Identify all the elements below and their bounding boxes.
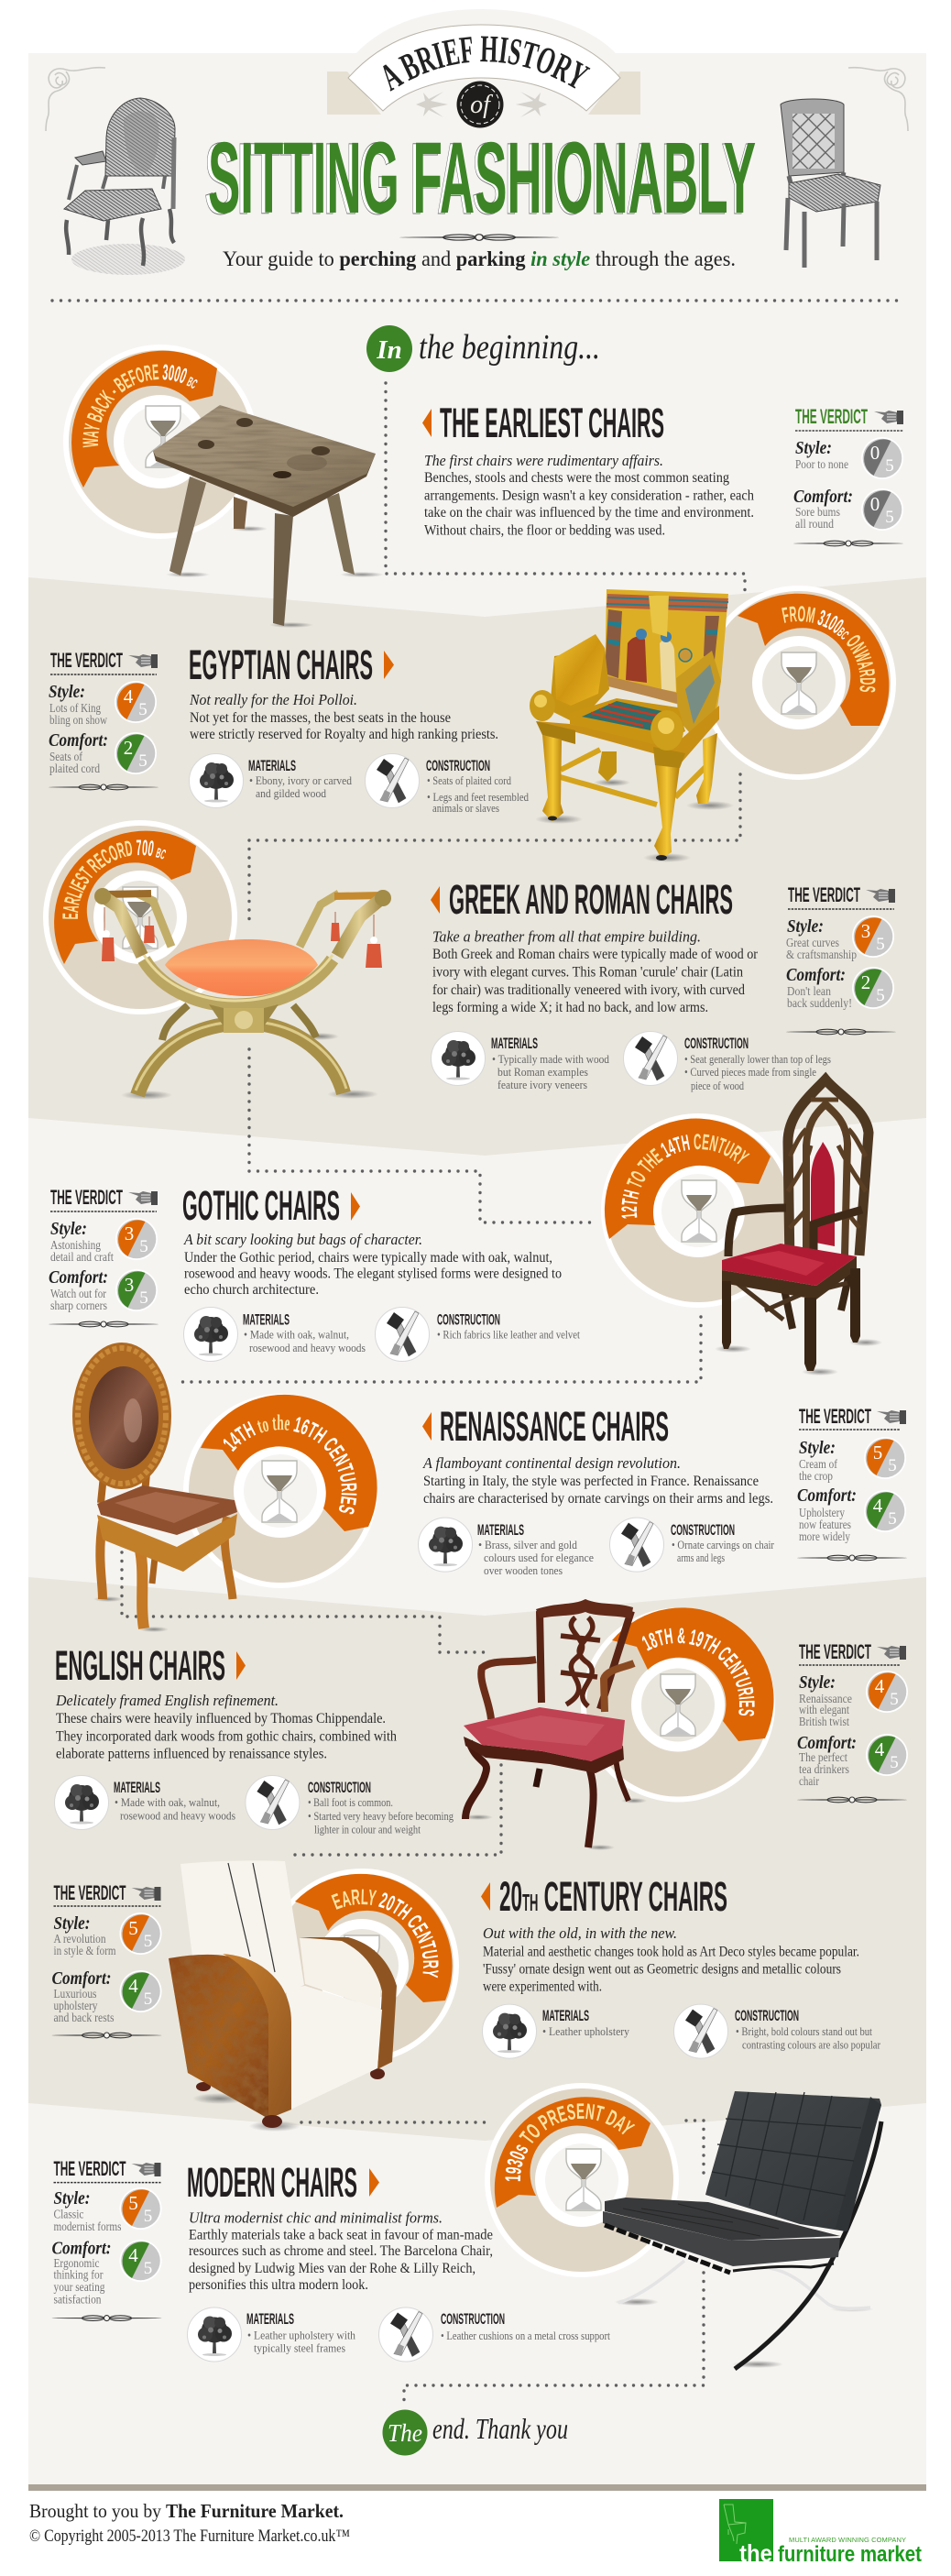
renaissance chair photo [72,1343,237,1632]
verdict: Comfort: [49,1267,108,1288]
verdict: Style: [50,1219,87,1239]
construction [623,1032,831,1092]
construction [376,1307,580,1362]
of badge: of [470,91,493,119]
materials: colours used for elegance [484,1551,594,1564]
verdict: with elegant [799,1704,849,1717]
verdict: 5 [144,1990,152,2009]
description: Not really for the Hoi Polloi. [189,691,357,708]
materials: • Typically made with wood [492,1052,609,1066]
tan background band 1 [28,577,926,1156]
description: Starting in Italy, the style was perfected in France. Renaissance [423,1474,759,1489]
verdict: 4 [875,1675,885,1697]
verdict: 5 [885,508,894,527]
heading [431,876,733,923]
date badge: earliest record [43,820,237,1014]
verdict: THE VERDICT [50,649,123,672]
verdict: 2 [861,971,870,993]
description: personifies this ultra modern look. [189,2277,368,2293]
construction [246,1776,454,1836]
engraved chair left [64,98,185,275]
verdict: 5 [888,1509,897,1529]
verdict: 4 [128,1975,138,1997]
date badge: 1930s to present day: 1930s TO PRESENT DAY [505,2103,636,2181]
description: for chair) was traditionally veneered with ivory, with curved [432,982,745,998]
heading: EGYPTIAN CHAIRS [189,641,373,688]
construction: CONSTRUCTION [671,1522,735,1539]
verdict: Comfort: [797,1733,857,1753]
verdict: The perfect [799,1751,847,1765]
verdict: Style: [53,2188,90,2209]
heading: ENGLISH CHAIRS [55,1642,225,1689]
description: chairs are characterised by ornate carvings on their arms and legs. [423,1491,773,1507]
tan background band 2 [28,1577,926,2141]
verdict: modernist forms [53,2220,121,2234]
verdict: 4 [873,1495,883,1517]
verdict: Poor to none [795,458,848,472]
materials: • Leather upholstery with [247,2329,355,2342]
verdict: plaited cord [49,762,100,776]
section: earliest chairs [422,400,903,546]
description: take on the chair was influenced by the time and environment. [424,505,754,521]
verdict: Renaissance [799,1693,852,1706]
verdict [797,1640,908,1803]
barcelona chair photo [603,2091,881,2369]
date badge: 12th to 14th century: 12TH TO THE 14TH CENTURY [621,1134,749,1219]
materials: MATERIALS [246,2311,294,2328]
description [424,452,754,539]
description [432,928,759,1015]
verdict: Seats of [49,751,82,764]
verdict [49,1186,158,1327]
date badge: 18th and 19th centuries [581,1607,775,1802]
date badge: from 3100bc [713,586,896,780]
heading [55,1642,246,1689]
construction: • Started very heavy before becoming [308,1809,454,1823]
verdict: Comfort: [51,1968,112,1989]
date badge: 14th to 16th centuries [183,1394,377,1588]
description: echo church architecture. [184,1282,319,1298]
materials: over wooden tones [484,1563,563,1577]
verdict: chair [799,1775,819,1789]
verdict: your seating [53,2281,104,2295]
section: 20th century chairs [51,1873,881,2058]
side stars [416,92,547,117]
dotted timeline paths [122,383,745,2403]
materials: MATERIALS [248,758,296,774]
banner text: A BRIEF HISTORY [383,37,590,92]
verdict: 0 [870,493,880,515]
verdict: Comfort: [793,487,853,507]
construction: • Ornate carvings on chair [672,1538,775,1551]
construction: piece of wood [691,1079,744,1092]
heading [189,641,394,688]
materials: • Brass, silver and gold [478,1538,577,1551]
footer logo [719,2499,922,2567]
verdict: 2 [124,737,133,759]
description: Take a breather from all that empire building. [432,928,701,946]
verdict: Watch out for [50,1288,106,1301]
engraved chair right [781,99,880,268]
materials: • Leather upholstery [542,2024,629,2038]
materials [189,753,352,808]
description: were experimented with. [483,1979,602,1995]
egyptian chair photo [530,589,734,862]
verdict: Style: [799,1438,836,1458]
construction: • Legs and feet resembled [427,790,529,804]
section: modern chairs [51,2157,610,2362]
art deco chair photo [169,1860,397,2132]
verdict: Comfort: [797,1485,857,1506]
materials [55,1776,235,1829]
description [189,691,498,742]
verdict: Don't lean [787,985,831,999]
description: rosewood and heavy woods. The elegant stylised forms were designed to [184,1266,562,1282]
description: Ultra modernist chic and minimalist forms. [189,2209,443,2227]
verdict [51,2157,161,2321]
verdict: 4 [128,2244,138,2266]
verdict: & craftsmanship [786,948,857,962]
section: egyptian chairs [49,641,529,815]
description [189,2209,493,2293]
verdict: Style: [787,916,824,937]
closing: the end thank you: end. Thank you [432,2412,568,2445]
verdict: satisfaction [53,2293,101,2307]
construction: • Leather cushions on a metal cross support [441,2329,610,2342]
footer credits: Brought to you by The Furniture Market. [29,2500,344,2522]
construction: CONSTRUCTION [441,2311,505,2328]
materials [431,1032,609,1091]
closing: the end thank you [383,2410,568,2456]
heading [422,400,664,446]
heading: GOTHIC CHAIRS [182,1182,340,1229]
date badge: early 20th century: EARLY 20TH CENTURY [332,1890,438,1978]
section: renaissance chairs [418,1403,907,1577]
footer logo: furniture market [778,2542,922,2567]
date badge: 1930s to present day [485,2083,679,2277]
construction [379,2307,610,2362]
description: A bit scary looking but bags of character. [183,1231,422,1248]
verdict: sharp corners [50,1299,107,1313]
verdict [49,649,158,790]
description: elaborate patterns influenced by renaissance styles. [56,1747,327,1761]
intro: in the beginning: In [376,335,402,365]
construction [610,1518,775,1572]
materials: MATERIALS [243,1312,290,1329]
description: Without chairs, the floor or bedding was used. [424,522,665,539]
verdict: 5 [139,1237,148,1256]
verdict [793,405,903,546]
stool photo [153,405,384,628]
verdict: thinking for [53,2269,104,2282]
construction: animals or slaves [432,801,499,815]
verdict: 5 [138,751,148,771]
verdict: Style: [795,438,832,458]
verdict [797,1405,907,1561]
header divider [52,299,903,302]
description [483,1924,859,1995]
materials [183,1307,366,1362]
verdict: 5 [873,1441,882,1463]
heading [182,1182,360,1229]
verdict: British twist [799,1716,849,1729]
verdict: 5 [144,1932,152,1951]
description: A flamboyant continental design revolution. [422,1454,681,1472]
description [183,1231,562,1298]
construction: CONSTRUCTION [684,1036,749,1052]
materials: • Made with oak, walnut, [115,1795,220,1809]
materials: feature ivory veneers [497,1078,587,1091]
verdict: 5 [144,2207,152,2226]
materials: • Made with oak, walnut, [244,1328,349,1342]
verdict [51,1881,161,2038]
verdict: bling on show [49,714,108,728]
ornament under title [399,235,559,240]
verdict: THE VERDICT [788,883,860,906]
verdict: Upholstery [799,1507,845,1520]
title banner: a brief history of [327,24,640,128]
verdict: THE VERDICT [799,1405,871,1428]
construction: CONSTRUCTION [735,2008,799,2024]
verdict: 5 [876,986,885,1005]
verdict: 5 [138,700,148,719]
description: Both Greek and Roman chairs were typically made of wood or [432,947,759,962]
verdict: THE VERDICT [53,2157,126,2180]
verdict: more widely [799,1530,850,1544]
construction: • Rich fabrics like leather and velvet [437,1328,580,1342]
verdict: and back rests [53,2011,114,2025]
closing: the end thank you: The [388,2419,422,2447]
materials: MATERIALS [491,1036,538,1052]
section: english chairs [55,1640,908,1836]
date badge: earliest record: EARLIEST RECORD 700 BC [62,839,167,919]
section: gothic chairs [49,1182,580,1362]
construction: • Ball foot is common. [308,1795,393,1809]
verdict: 3 [125,1274,134,1296]
description [422,1454,773,1507]
verdict: Ergonomic [53,2257,99,2271]
date badge: from 3100bc: FROM 3100BC ONWARDS [782,606,876,693]
verdict [786,883,896,1035]
construction: contrasting colours are also popular [742,2038,881,2051]
heading: MODERN CHAIRS [187,2159,357,2206]
heading: 20TH CENTURY CHAIRS [499,1873,727,1920]
verdict: 4 [875,1738,885,1760]
construction: CONSTRUCTION [426,758,490,774]
section: greek and roman chairs [431,876,896,1092]
date badge: way back [63,345,254,539]
description: Benches, stools and chests were the most common seating [424,470,729,486]
materials [482,2004,629,2058]
verdict: Sore bums [795,506,840,520]
header corner flourishes [46,68,908,131]
gothic chair photo [715,1080,882,1376]
construction: • Seat generally lower than top of legs [684,1052,831,1066]
verdict: 3 [125,1222,134,1244]
description: Not yet for the masses, the best seats in the house [190,710,451,726]
verdict: 5 [890,1690,899,1709]
verdict: Style: [49,682,85,702]
materials: MATERIALS [542,2008,589,2024]
verdict: Classic [53,2209,84,2221]
materials: MATERIALS [114,1780,160,1796]
materials: rosewood and heavy woods [249,1341,366,1354]
verdict: 5 [888,1456,897,1475]
description: Delicately framed English refinement. [55,1692,279,1709]
verdict: Comfort: [786,965,846,985]
verdict: 5 [128,1917,138,1939]
intro: in the beginning: the beginning... [419,328,600,367]
verdict: 5 [128,2192,138,2214]
date badge: 14th to 16th centuries: 14TH to the 16TH CENTURIES [224,1415,357,1514]
verdict: 3 [861,920,870,942]
verdict: Luxurious [53,1988,97,2001]
materials: MATERIALS [477,1522,524,1539]
construction: • Seats of plaited cord [427,773,511,787]
verdict: Style: [53,1913,90,1934]
verdict: the crop [799,1470,833,1484]
verdict: THE VERDICT [795,405,868,428]
verdict: 5 [139,1288,148,1308]
section: renaissance chairs: RENAISSANCE CHAIRS [440,1403,669,1450]
description: These chairs were heavily influenced by Thomas Chippendale. [56,1711,386,1726]
of badge [456,81,504,128]
materials [418,1518,594,1577]
footer credits: © Copyright 2005-2013 The Furniture Market.co.uk™ [29,2527,350,2546]
description [55,1692,397,1761]
verdict: upholstery [53,2000,97,2013]
verdict: 5 [885,456,894,476]
verdict: 5 [876,935,885,954]
description: The first chairs were rudimentary affairs. [424,452,663,469]
materials: but Roman examples [497,1065,588,1079]
heading [481,1873,727,1920]
date badge: 12th to 14th century [601,1113,795,1308]
description: were strictly reserved for Royalty and high ranking priests. [190,727,498,742]
english chair photo [464,1599,647,1850]
description: ivory with elegant curves. This Roman 'curule' chair (Latin [432,964,743,981]
section: earliest chairs: THE EARLIEST CHAIRS [440,400,664,446]
construction [674,2004,881,2058]
footer credits [29,2500,350,2546]
description: designed by Ludwig Mies van der Rohe & Lilly Reich, [189,2261,476,2276]
construction: lighter in colour and weight [314,1823,421,1836]
verdict: 0 [870,442,880,464]
verdict: all round [795,518,834,532]
heading [187,2159,379,2206]
construction: • Curved pieces made from single [684,1065,816,1079]
date badge: way back: WAY BACK - BEFORE 3000 BC [82,365,198,447]
footer logo: MULTI AWARD WINNING COMPANY [789,2536,906,2544]
construction: CONSTRUCTION [437,1312,500,1329]
verdict: 5 [890,1753,899,1772]
verdict: detail and craft [50,1251,114,1265]
description: 'Fussy' ornate design went out as Geometric designs and metallic colours [483,1961,841,1977]
verdict: tea drinkers [799,1763,849,1777]
footer logo: the [739,2539,772,2567]
construction: arms and legs [677,1551,725,1564]
verdict: 4 [124,685,134,707]
materials: rosewood and heavy woods [120,1809,235,1823]
verdict: Cream of [799,1458,837,1472]
description: Out with the old, in with the new. [483,1924,677,1942]
verdict: Style: [799,1672,836,1693]
materials [187,2307,355,2362]
verdict: A revolution [53,1933,106,1946]
description: arrangements. Design wasn't a key consideration - rather, each [424,488,754,504]
materials: typically steel frames [254,2340,345,2355]
date badge: early 20th century [286,1869,459,2058]
subtitle: Your guide to perching and parking in style through the ages. [223,247,736,270]
materials: and gilded wood [256,786,326,800]
construction: CONSTRUCTION [308,1780,371,1796]
verdict: Great curves [786,937,839,950]
verdict: THE VERDICT [53,1881,126,1904]
description: They incorporated dark woods from gothic chairs, combined with [56,1729,397,1745]
description: resources such as chrome and steel. The Barcelona Chair, [189,2243,493,2259]
verdict: Comfort: [49,730,108,751]
description: Material and aesthetic changes took hold as Art Deco styles became popular. [483,1945,859,1959]
date badge: 18th and 19th centuries: 18TH & 19TH CENTURIES [641,1628,755,1716]
verdict: Lots of King [49,702,101,716]
curule chair photo [94,888,391,1100]
verdict: now features [799,1518,851,1532]
verdict: Astonishing [50,1239,101,1253]
intro: in the beginning [366,325,600,372]
materials: • Ebony, ivory or carved [249,773,352,787]
verdict: back suddenly! [787,997,852,1011]
description: legs forming a wide X; it had no back, and low arms. [432,1000,708,1015]
footer rule [28,2484,926,2491]
description: Earthly materials take a back seat in favour of man-made [189,2227,493,2243]
verdict: THE VERDICT [799,1640,871,1663]
verdict: in style & form [53,1945,116,1958]
construction [365,753,529,815]
verdict: THE VERDICT [50,1186,123,1209]
construction: • Bright, bold colours stand out but [736,2024,872,2038]
verdict: Comfort: [51,2238,112,2258]
verdict: 5 [144,2259,152,2278]
heading [422,1403,669,1450]
description: Under the Gothic period, chairs were typically made with oak, walnut, [184,1250,552,1266]
